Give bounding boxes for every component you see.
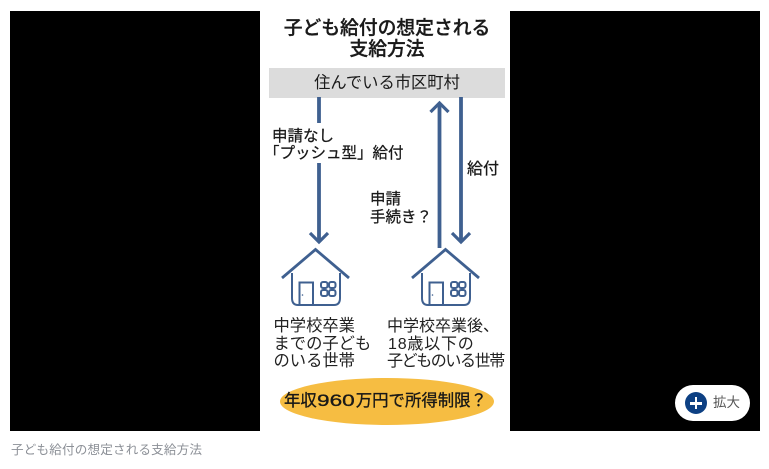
label: income limit: 960 (317, 391, 355, 410)
label: application (370, 190, 432, 226)
label: households right: 子どものいる世帯 (387, 353, 504, 370)
label: households right (387, 317, 504, 370)
caption: 子ども給付の想定される支給方法 (11, 443, 202, 457)
label: application: 手続き？ (370, 208, 432, 226)
label: households left: までの子ども (274, 334, 371, 352)
label: households left (274, 316, 371, 370)
button label: 拡大 (713, 395, 740, 410)
municipality bar (269, 68, 505, 98)
municipality bar: 住んでいる市区町村 (314, 74, 460, 92)
title (284, 17, 490, 59)
arrows and houses (280, 97, 494, 425)
icon: house left (282, 250, 349, 305)
label: no application push: 「プッシュ型」給付 (264, 145, 404, 162)
panel: infographic (260, 11, 510, 431)
icon: house right (412, 250, 479, 305)
label: application: 申請 (370, 191, 401, 208)
icon: plus (685, 392, 707, 414)
arrow: payment down (452, 97, 470, 242)
title: 支給方法 (349, 38, 425, 59)
label: households right: 18歳以下の (388, 336, 475, 352)
label: households left: 中学校卒業 (274, 317, 355, 335)
label: no application push (264, 128, 404, 162)
arrow: application up (430, 103, 448, 248)
label: households left: のいる世帯 (274, 352, 355, 370)
title: 子ども給付の想定される (284, 17, 490, 38)
label: income limit: 年収 万円で所得制限？ (284, 392, 487, 410)
income limit ellipse (280, 378, 494, 425)
arrow: push delivery (310, 97, 328, 242)
zoom button (675, 385, 750, 421)
label: households right: 中学校卒業後、 (387, 318, 499, 335)
label: payment: 給付 (467, 161, 499, 178)
label: no application push: 申請なし (272, 128, 334, 144)
